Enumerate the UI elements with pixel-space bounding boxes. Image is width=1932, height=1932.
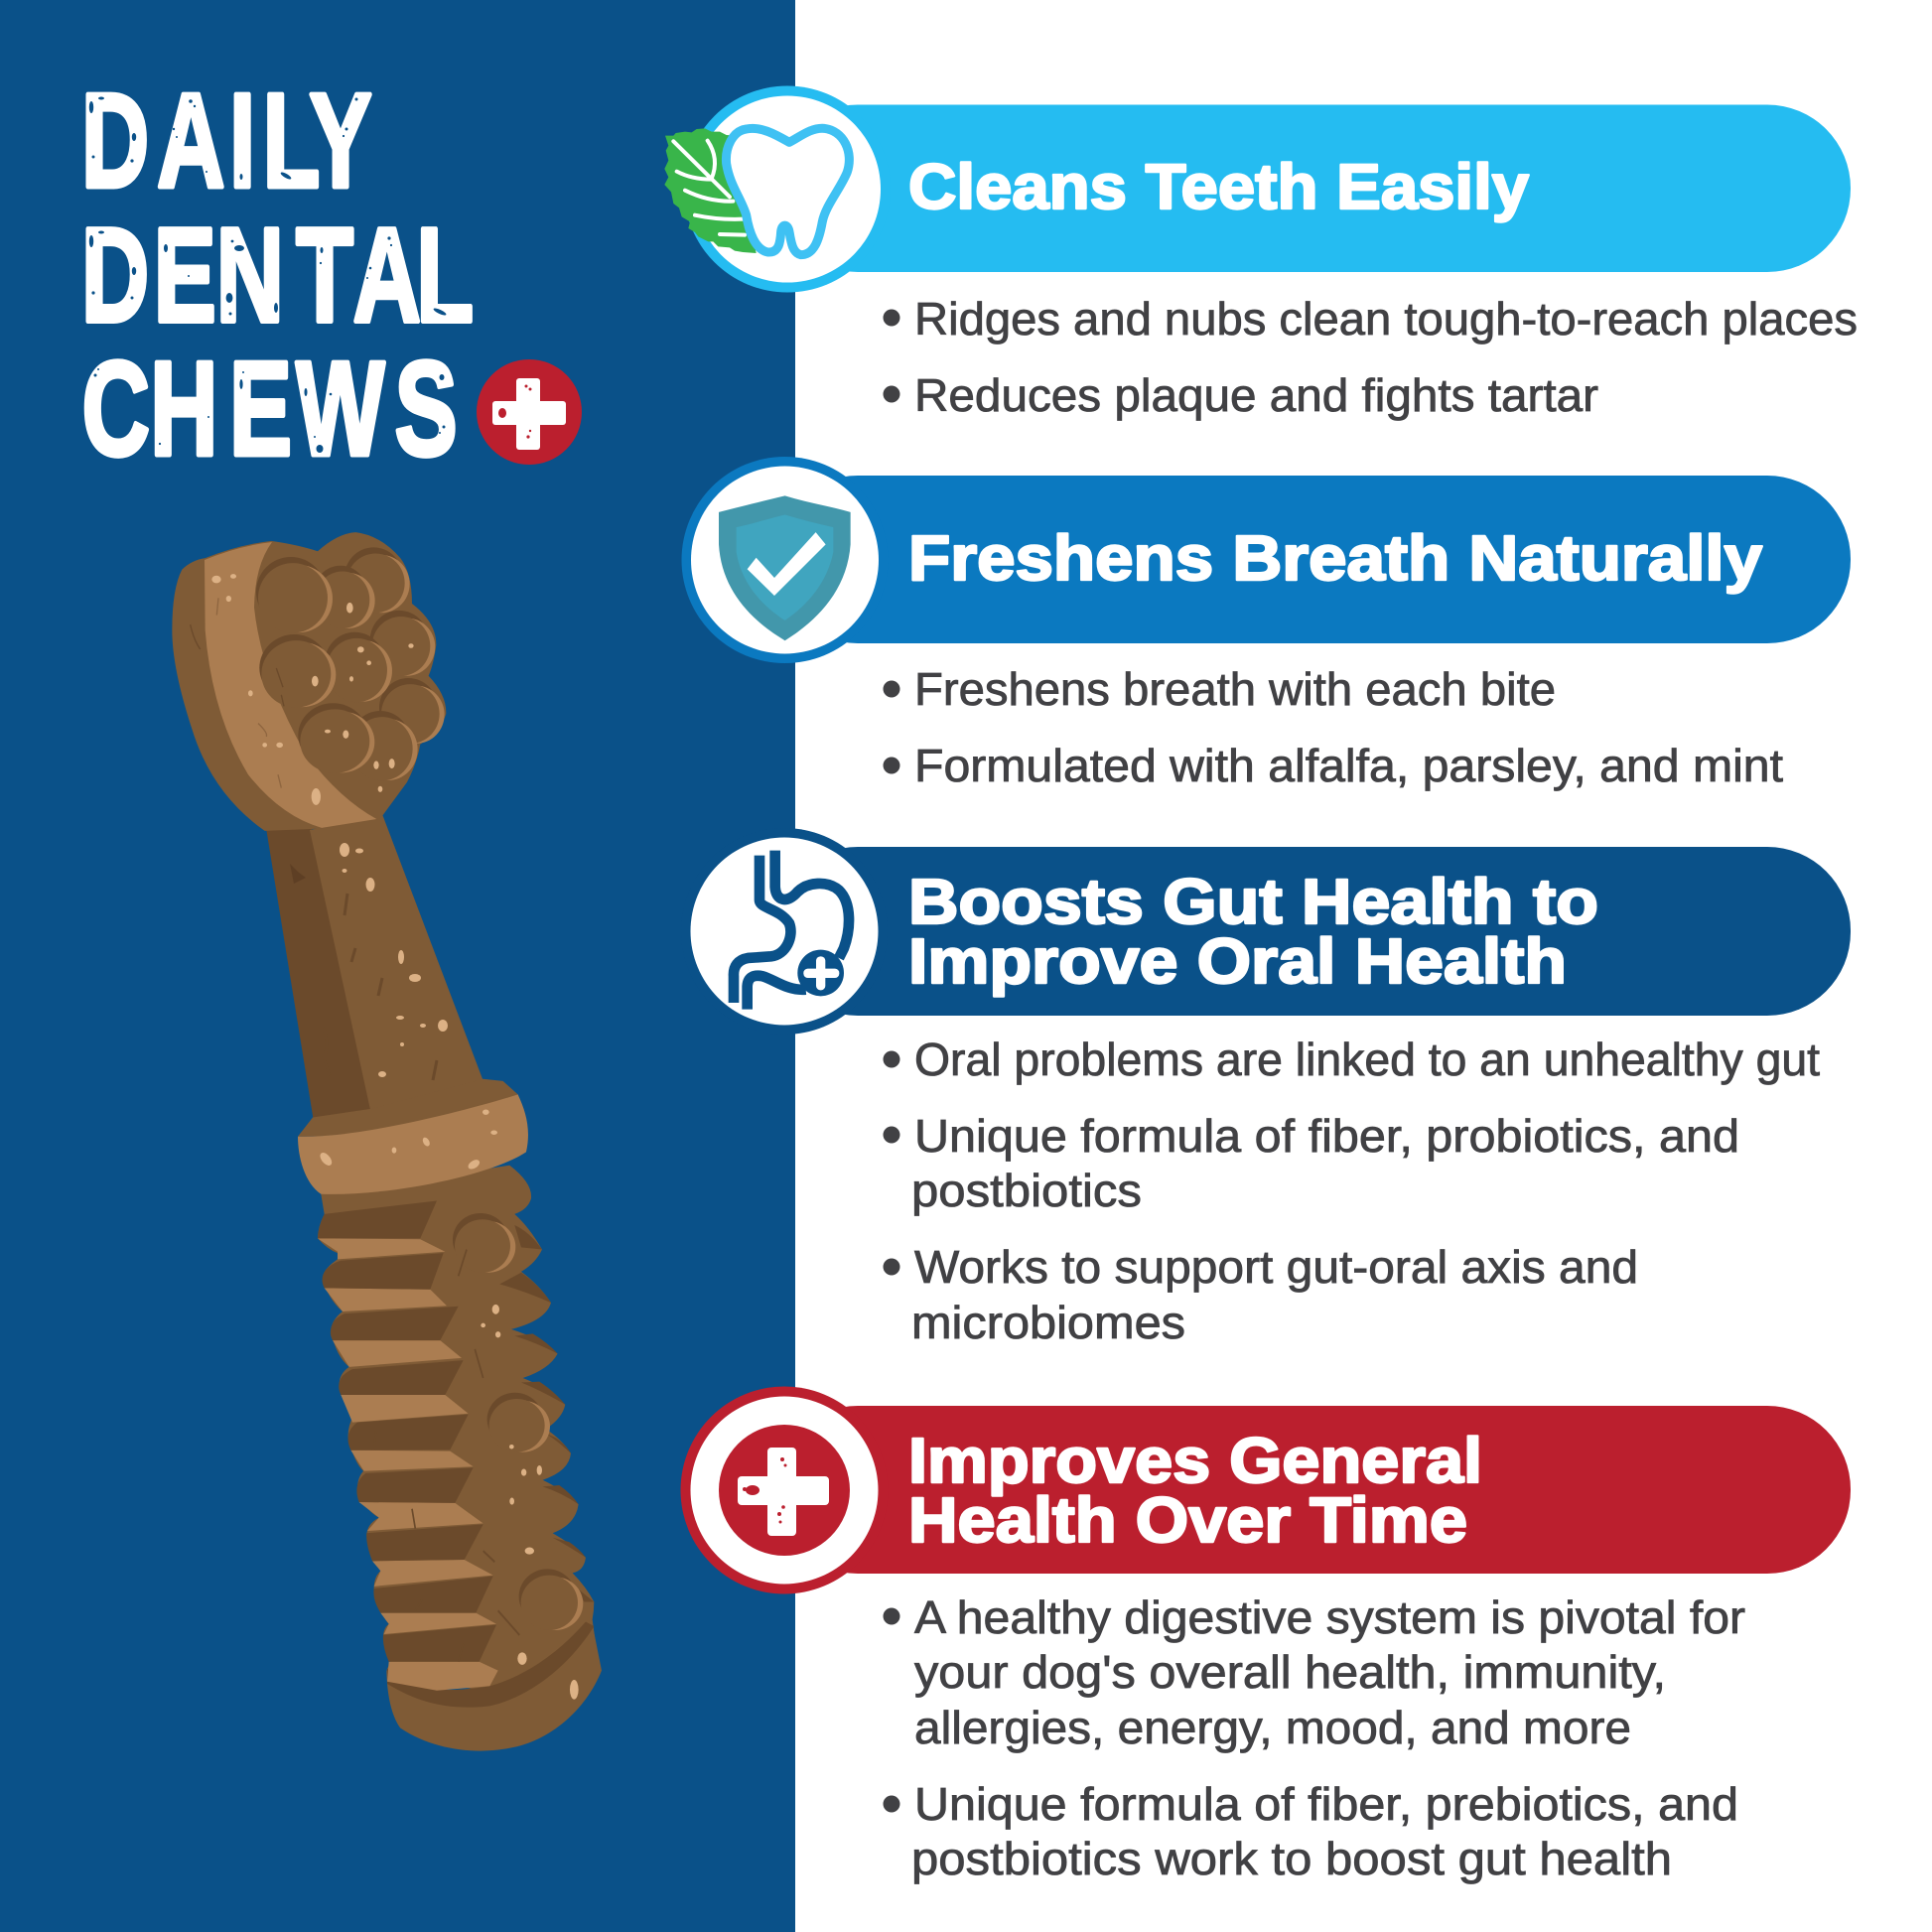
- pill: boosts gut health: [681, 828, 1851, 1348]
- bullet list: [884, 663, 1783, 791]
- bullet list: [884, 293, 1858, 421]
- heading: Cleans Teeth Easily: [908, 151, 1529, 222]
- right notches: [499, 1225, 594, 1601]
- heading: [908, 866, 1598, 997]
- bullet list: Unique formula of fiber, prebiotics, and: [914, 1778, 1738, 1830]
- icon: medical cross in ring: [681, 1386, 888, 1594]
- bullet list: microbiomes: [911, 1297, 1185, 1348]
- icon: red cross badge in title: [477, 359, 582, 465]
- bullet list: allergies, energy, mood, and more: [914, 1702, 1631, 1753]
- illustration: dental chew stick: [172, 532, 602, 1751]
- bullet list: Unique formula of fiber, probiotics, and: [914, 1110, 1739, 1162]
- rib bumps: [453, 1213, 508, 1267]
- bullet list: Formulated with alfalfa, parsley, and mint: [914, 740, 1783, 791]
- bullet list: Oral problems are linked to an unhealthy gut: [914, 1034, 1820, 1085]
- panel: left blue column: [0, 0, 795, 1932]
- chew ribbed body, collar and base: [298, 1079, 602, 1751]
- bullet list: Reduces plaque and fights tartar: [914, 369, 1598, 421]
- bumps: [256, 547, 445, 780]
- pill: cleans teeth easily: [664, 85, 1858, 421]
- light stripes: [318, 1238, 498, 1691]
- bullet list: Ridges and nubs clean tough-to-reach places: [914, 293, 1858, 345]
- heading: Improve Oral Health: [908, 925, 1567, 997]
- icon: stomach with plus: [681, 828, 888, 1035]
- chew head with bumps: [172, 532, 446, 831]
- dark stripes: [318, 1200, 496, 1662]
- heading: Health Over Time: [908, 1484, 1467, 1556]
- title: Daily Dental Chews: DENTAL: [81, 201, 474, 349]
- bullet list: Works to support gut-oral axis and: [914, 1241, 1638, 1293]
- heading: Improves General: [908, 1425, 1482, 1496]
- bullet list: your dog's overall health, immunity,: [914, 1646, 1666, 1698]
- pill: improves general health: [681, 1386, 1851, 1884]
- bullet list: postbiotics: [911, 1165, 1142, 1216]
- collar: [298, 1079, 518, 1137]
- bullet list: [884, 1034, 1820, 1348]
- title: Daily Dental Chews: CHEWS: [82, 334, 458, 483]
- bullet list: [884, 1591, 1745, 1884]
- icon: shield with check: [681, 457, 888, 663]
- heading: Boosts Gut Health to: [908, 866, 1598, 937]
- bullet list: postbiotics work to boost gut health: [911, 1833, 1672, 1884]
- heading: Freshens Breath Naturally: [908, 522, 1762, 594]
- bullet list: Freshens breath with each bite: [914, 663, 1556, 715]
- icon: tooth and mint leaf in ring: [664, 85, 891, 292]
- chew neck: [266, 814, 484, 1122]
- title: Daily Dental Chews: DAILY: [81, 66, 372, 215]
- pill: freshens breath naturally: [681, 457, 1851, 791]
- ribbed body silhouette: [318, 1166, 596, 1693]
- heading: [908, 1425, 1482, 1556]
- title: Daily Dental Chews: [81, 66, 474, 483]
- base: [386, 1624, 602, 1751]
- bullet list: A healthy digestive system is pivotal for: [914, 1591, 1745, 1643]
